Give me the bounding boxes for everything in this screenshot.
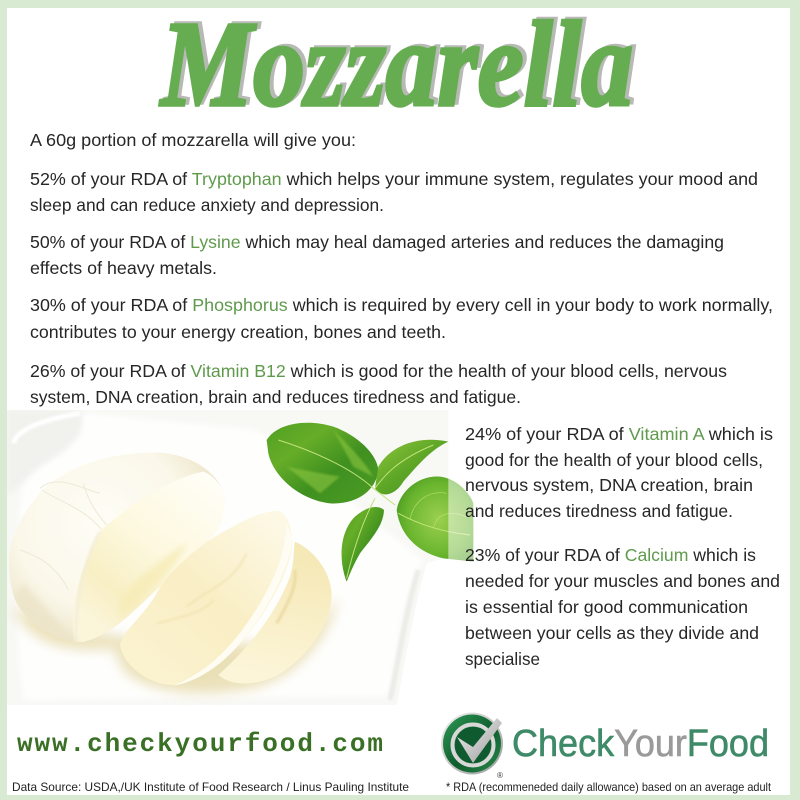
- text block: Vitamin A: [465, 424, 773, 521]
- text block: Vitamin A: good for the health of your blood cells,: [465, 450, 763, 470]
- far mozzarella slice: [218, 542, 332, 683]
- text block: Calcium: between your cells as they divide and: [465, 623, 759, 643]
- text block: Tryptophan: 52% of your RDA of Tryptophan which helps your immune system, regulates your mood and: [30, 169, 758, 189]
- icon: CheckYourFood logo badge: [441, 712, 503, 780]
- text block: Vitamin A: nervous system, DNA creation, brain: [465, 475, 753, 495]
- icon: CheckYourFood logo badge: ®: [497, 771, 503, 780]
- text block: Vitamin B12: 26% of your RDA of Vitamin B12 which is good for the health of your blood cells, nervous: [30, 361, 727, 381]
- text block: Vitamin A: 24% of your RDA of Vitamin A which is: [465, 424, 773, 444]
- text block: Vitamin A: and reduces tiredness and fatigue.: [465, 501, 733, 521]
- text block: Phosphorus: [30, 295, 773, 342]
- translucent white overlay on leaf: [448, 475, 478, 563]
- text block: Tryptophan: sleep and can reduce anxiety and depression.: [30, 195, 384, 215]
- text block: Calcium: specialise: [465, 649, 540, 669]
- title: Mozzarella: Mozzarella: [159, 0, 633, 132]
- text block: Vitamin B12: [30, 361, 727, 407]
- text block: Phosphorus: contributes to your energy creation, bones and teeth.: [30, 322, 446, 342]
- basil leaves: [267, 423, 473, 582]
- text block: Calcium: needed for your muscles and bones and: [465, 571, 780, 591]
- text block: Calcium: [465, 545, 780, 669]
- text block: Vitamin B12: system, DNA creation, brain and reduces tiredness and fatigue.: [30, 387, 521, 407]
- big mozzarella ball: [9, 453, 227, 643]
- cheese shadow: [12, 597, 338, 693]
- website URL: www.checkyourfood.com: [17, 729, 383, 759]
- logo wordmark: CheckYourFood: CheckYourFood: [512, 723, 769, 765]
- photo: mozzarella on plate with basil: [7, 410, 478, 705]
- text block: Calcium: is essential for good communication: [465, 597, 748, 617]
- text block: Calcium: 23% of your RDA of Calcium which is: [465, 545, 756, 565]
- text block: Phosphorus: 30% of your RDA of Phosphorus which is required by every cell in your body to work normally,: [30, 295, 773, 315]
- text block: Tryptophan: [30, 169, 758, 215]
- text block: Lysine: [30, 232, 724, 278]
- text block: Lysine: effects of heavy metals.: [30, 258, 217, 278]
- footer: data source: Data Source: USDA,/UK Institute of Food Research / Linus Pauling Institute: [12, 780, 409, 794]
- footer: RDA note: * RDA (recommeneded daily allowance) based on an average adult: [446, 780, 772, 794]
- near mozzarella slice: [120, 511, 293, 686]
- intro text: A 60g portion of mozzarella will give you:: [30, 130, 356, 150]
- text block: Lysine: 50% of your RDA of Lysine which may heal damaged arteries and reduces the damaging: [30, 232, 724, 252]
